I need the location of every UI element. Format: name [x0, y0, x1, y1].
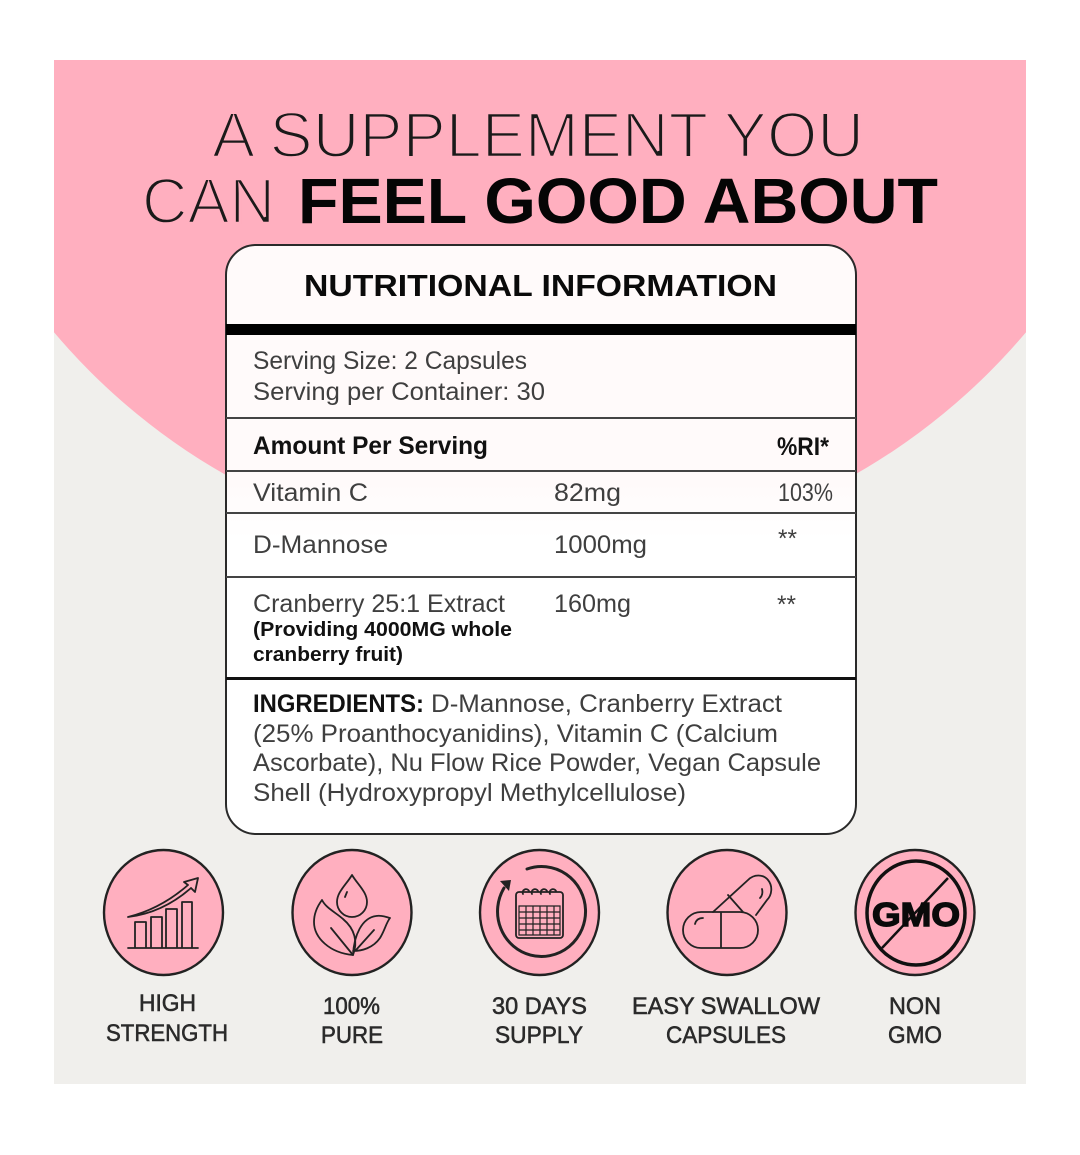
- ingredients text: D-Mannose, Cranberry Extract: [431, 690, 782, 718]
- ingredients text: [253, 690, 821, 807]
- serving info: [253, 347, 545, 406]
- icon: pure leaves and drop: [292, 850, 412, 975]
- label: 100% pure: PURE: [321, 1022, 383, 1049]
- label: 100% pure: [321, 993, 383, 1049]
- ingredients text: Shell (Hydroxypropyl Methylcellulose): [253, 779, 686, 807]
- ingredients text: INGREDIENTS:: [253, 690, 424, 718]
- icon: non GMO: GMO: [872, 896, 960, 933]
- label: high strength: HIGH: [139, 990, 196, 1017]
- label: high strength: [106, 990, 228, 1047]
- row: vitamin C: Vitamin C: [253, 479, 368, 507]
- label: non GMO: [888, 993, 942, 1049]
- label: non GMO: NON: [889, 993, 941, 1020]
- ingredients text: (25% Proanthocyanidins), Vitamin C (Calcium: [253, 720, 778, 748]
- row: vitamin C: [253, 479, 833, 507]
- row: vitamin C: 103%: [778, 479, 833, 507]
- label: 30 days supply: [492, 993, 587, 1049]
- background panel: [54, 60, 1026, 1084]
- table heading: NUTRITIONAL INFORMATION: [304, 268, 777, 303]
- row: D-Mannose: [253, 525, 797, 559]
- label: easy swallow capsules: CAPSULES: [666, 1022, 786, 1049]
- label: non GMO: GMO: [888, 1022, 942, 1049]
- row: cranberry extract: cranberry fruit): [253, 644, 403, 666]
- icon: easy swallow capsules: [668, 850, 786, 975]
- serving info: Serving Size: 2 Capsules: [253, 347, 527, 375]
- row: vitamin C: 82mg: [554, 479, 621, 507]
- label: 100% pure: 100%: [323, 993, 380, 1020]
- row: D-Mannose: 1000mg: [554, 531, 647, 559]
- serving info: Serving per Container: 30: [253, 378, 545, 406]
- title: [142, 99, 938, 237]
- title: FEEL GOOD ABOUT: [298, 165, 938, 237]
- title: A SUPPLEMENT YOU: [212, 99, 864, 171]
- icon: non GMO: [856, 850, 974, 975]
- icon: 30 days supply calendar: [480, 850, 599, 975]
- row: cranberry extract: [253, 590, 796, 666]
- row: cranberry extract: 160mg: [554, 590, 631, 618]
- label: easy swallow capsules: [632, 993, 820, 1049]
- icon: high strength: [104, 850, 223, 975]
- table header row: [253, 432, 829, 461]
- row: cranberry extract: (Providing 4000MG whole: [253, 619, 512, 641]
- ingredients text: Ascorbate), Nu Flow Rice Powder, Vegan Capsule: [253, 749, 821, 777]
- panel: nutrition table: [226, 245, 856, 834]
- label: high strength: STRENGTH: [106, 1020, 228, 1047]
- label: 30 days supply: 30 DAYS: [492, 993, 587, 1020]
- table header row: Amount Per Serving: [253, 432, 488, 460]
- table header row: %RI*: [777, 433, 829, 461]
- row: cranberry extract: Cranberry 25:1 Extract: [253, 590, 505, 618]
- row: cranberry extract: **: [777, 591, 796, 619]
- label: easy swallow capsules: EASY SWALLOW: [632, 993, 820, 1020]
- row: D-Mannose: **: [778, 525, 797, 553]
- title: CAN: [142, 165, 275, 237]
- label: 30 days supply: SUPPLY: [495, 1022, 583, 1049]
- row: D-Mannose: D-Mannose: [253, 531, 388, 559]
